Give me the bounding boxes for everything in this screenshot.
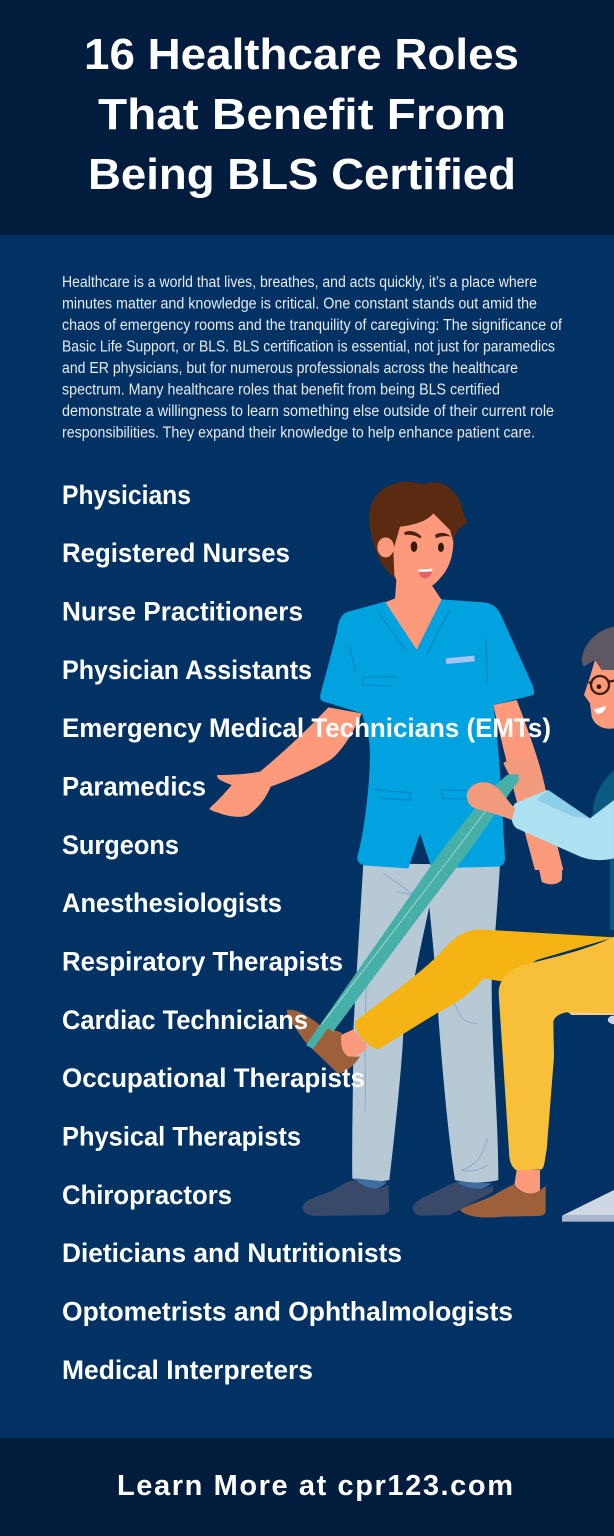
patient: smile — [594, 706, 606, 714]
upper illustration: worker torso and head — [209, 482, 563, 870]
patient: eye — [597, 684, 601, 689]
intro paragraph: Basic Life Support, or BLS. BLS certification is essential, not just for paramedics — [62, 338, 555, 356]
list of healthcare roles: Nurse Practitioners — [62, 596, 303, 626]
intro paragraph: minutes matter and knowledge is critical. One constant stands out amid the — [62, 296, 537, 312]
chair knob — [608, 1016, 614, 1024]
worker: right arm — [493, 700, 563, 870]
list of healthcare roles: Chiropractors — [62, 1180, 232, 1210]
illustration: healthcare worker and patient — [209, 482, 614, 1222]
patient: standing leg — [499, 937, 614, 1171]
footrest — [562, 1190, 614, 1216]
footer band — [0, 1438, 614, 1536]
intro paragraph: Healthcare is a world that lives, breathes, and acts quickly, it’s a place where — [62, 274, 537, 291]
list of healthcare roles — [62, 480, 551, 1385]
title: That Benefit From — [98, 90, 506, 139]
list of healthcare roles: Paramedics — [62, 772, 206, 802]
worker: neck — [385, 577, 442, 650]
list of healthcare roles: Registered Nurses — [62, 538, 290, 568]
patient: ankle — [514, 1170, 540, 1194]
patient: raised foot — [341, 1029, 368, 1057]
worker: hair — [369, 482, 468, 578]
patient: hand — [467, 782, 515, 820]
list of healthcare roles: Physical Therapists — [62, 1122, 301, 1152]
list of healthcare roles: Anesthesiologists — [62, 888, 282, 918]
resistance band — [306, 774, 519, 1049]
title: 16 Healthcare Roles — [84, 30, 519, 79]
worker: ear — [377, 537, 394, 557]
list of healthcare roles: Emergency Medical Technicians (EMTs) — [62, 713, 551, 743]
patient: lower shoe — [460, 1184, 546, 1218]
patient legs and chair — [287, 929, 614, 1222]
worker: shoes — [302, 1180, 493, 1216]
patient: torso lower edge — [610, 857, 614, 930]
intro paragraph: responsibilities. They expand their knowledge to help enhance patient care. — [62, 424, 535, 442]
patient: sleeve — [511, 790, 614, 860]
patient: face — [584, 660, 614, 729]
worker: right hand — [535, 850, 562, 884]
intro paragraph: and ER physicians, but for numerous professionals across the healthcare — [62, 360, 518, 377]
intro paragraph: chaos of emergency rooms and the tranquility of caregiving: The significance of — [62, 317, 563, 334]
title — [84, 30, 519, 199]
patient: hair — [582, 627, 614, 670]
list of healthcare roles: Physicians — [62, 480, 191, 510]
patient: raised shoe — [287, 1010, 360, 1074]
list of healthcare roles: Optometrists and Ophthalmologists — [62, 1296, 513, 1326]
worker: trouser creases — [365, 873, 487, 1171]
list of healthcare roles: Physician Assistants — [62, 655, 312, 685]
patient upper body — [467, 627, 614, 930]
worker: scrub seams — [349, 609, 487, 800]
header band — [0, 0, 614, 235]
worker: name badge — [446, 656, 475, 664]
intro paragraph: spectrum. Many healthcare roles that benefit from being BLS certified — [62, 382, 500, 398]
worker: trousers — [352, 863, 500, 1182]
list of healthcare roles: Medical Interpreters — [62, 1355, 313, 1385]
call to action: Learn More at cpr123.com — [117, 1470, 513, 1502]
patient: raised leg — [355, 929, 614, 1049]
worker: left arm and hand — [209, 707, 362, 817]
list of healthcare roles: Dieticians and Nutritionists — [62, 1238, 402, 1268]
intro paragraph: demonstrate a willingness to learn something else outside of their current role — [62, 403, 554, 420]
list of healthcare roles: Cardiac Technicians — [62, 1005, 308, 1035]
footrest base — [562, 1216, 614, 1222]
worker: facial features — [404, 531, 451, 578]
worker: face — [393, 513, 453, 592]
patient: glasses — [589, 676, 614, 694]
list of healthcare roles: Respiratory Therapists — [62, 946, 343, 976]
worker: forearm shadow — [503, 758, 545, 803]
chair seat — [566, 1004, 614, 1015]
main background panel — [0, 235, 614, 1438]
list of healthcare roles: Occupational Therapists — [62, 1063, 365, 1093]
worker: scrub top — [320, 599, 534, 868]
lower illustration: trousers, shoes and legs — [302, 850, 562, 1216]
worker: socks — [355, 1178, 492, 1190]
intro paragraph — [62, 274, 563, 442]
title: Being BLS Certified — [88, 150, 516, 199]
patient: sleeve shading — [537, 790, 590, 818]
list of healthcare roles: Surgeons — [62, 830, 179, 860]
patient: torso — [590, 770, 614, 818]
